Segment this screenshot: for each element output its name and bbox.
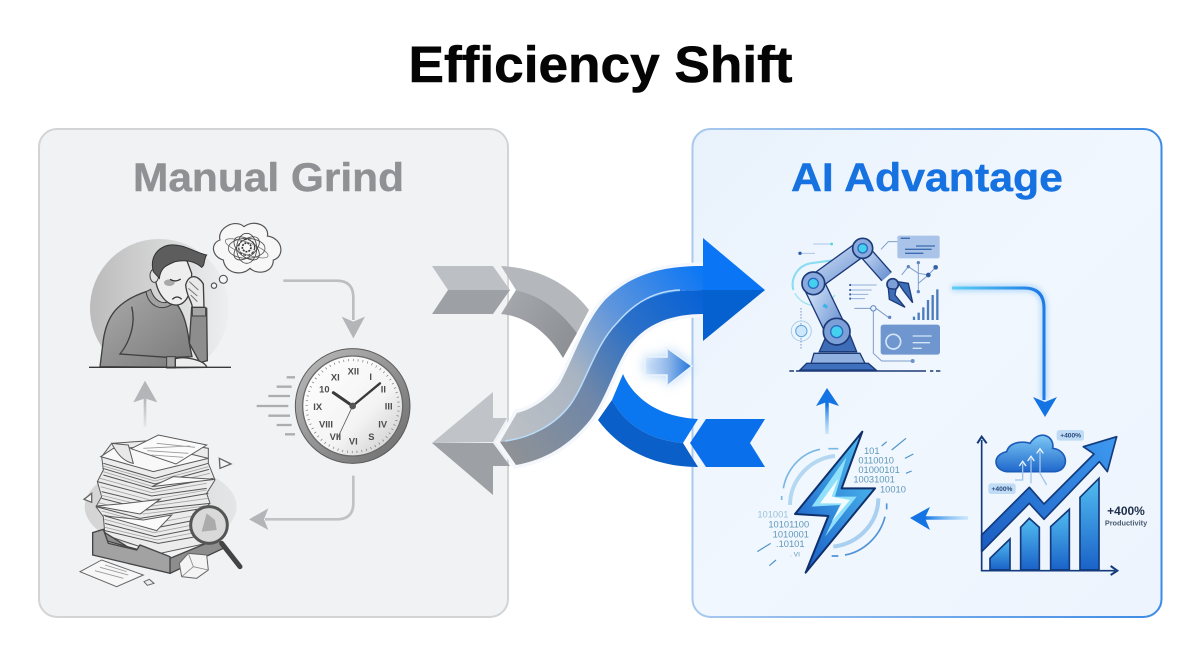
icon: wall clock: S (368, 432, 374, 442)
icon: wall clock: IX (313, 402, 323, 412)
icon: wall clock: VIII (319, 419, 333, 429)
arrow: robot to chart (952, 288, 1057, 417)
arrow: chart to lightning (910, 507, 968, 530)
arrow: lightning to robot (816, 388, 839, 434)
icon: lightning with binary data: . VI (790, 552, 800, 559)
icon: wall clock: II (381, 384, 386, 394)
icon: growth chart (977, 430, 1148, 575)
arrow: gray curve top (501, 266, 589, 358)
icon: wall clock: VI (349, 437, 358, 447)
title: Efficiency Shift (408, 36, 793, 93)
icon: lightning with binary data: 101 (864, 446, 880, 456)
arrow: blue chevron right (690, 419, 765, 467)
icon: lightning with binary data: 10101100 (768, 520, 809, 530)
icon: lightning with binary data (757, 432, 913, 573)
icon: wall clock: IV (378, 419, 388, 429)
icon: paper pile with magnifier (80, 435, 240, 587)
icon: wall clock (257, 349, 410, 463)
icon: lightning with binary data: 101001 (757, 510, 788, 520)
arrow: clock to paperwork (249, 476, 353, 530)
arrow: small center glow (645, 348, 692, 386)
heading: manual grind: Manual Grind (133, 156, 404, 200)
icon: wall clock: 10 (319, 384, 330, 394)
icon: wall clock: XII (348, 366, 359, 376)
panel: manual grind (39, 129, 508, 617)
icon: growth chart: +400% (1060, 433, 1081, 440)
icon: wall clock: XI (331, 373, 340, 383)
icon: growth chart: +400% (1107, 504, 1145, 518)
icon: lightning with binary data: 10010 (880, 484, 906, 494)
central crossing arrows (432, 238, 765, 495)
panel: AI advantage (692, 129, 1162, 617)
icon: stressed person (89, 223, 281, 368)
icon: lightning with binary data: 01000101 (858, 465, 900, 475)
icon: lightning with binary data: 10031001 (853, 474, 895, 484)
arrow: gray arrowhead left (432, 392, 510, 495)
arrow: paperwork to person (133, 381, 157, 427)
icon: wall clock: III (385, 401, 393, 411)
arrow: main S-curve to AI side (500, 238, 765, 465)
arrow: person to clock (283, 281, 365, 338)
arrow: blue curve bottom (598, 374, 698, 467)
icon: growth chart: Productivity (1105, 518, 1148, 527)
icon: growth chart: +400% (992, 486, 1013, 493)
icon: lightning with binary data: .10101 (776, 539, 805, 549)
icon: wall clock: I (369, 372, 372, 382)
heading: AI advantage: AI Advantage (791, 156, 1063, 200)
icon: lightning with binary data: 1010001 (773, 529, 809, 539)
arrow: gray chevron top (432, 266, 510, 314)
icon: lightning with binary data: 0110010 (858, 455, 894, 465)
icon: wall clock: VII (330, 432, 341, 442)
icon: robot arm (789, 236, 940, 371)
